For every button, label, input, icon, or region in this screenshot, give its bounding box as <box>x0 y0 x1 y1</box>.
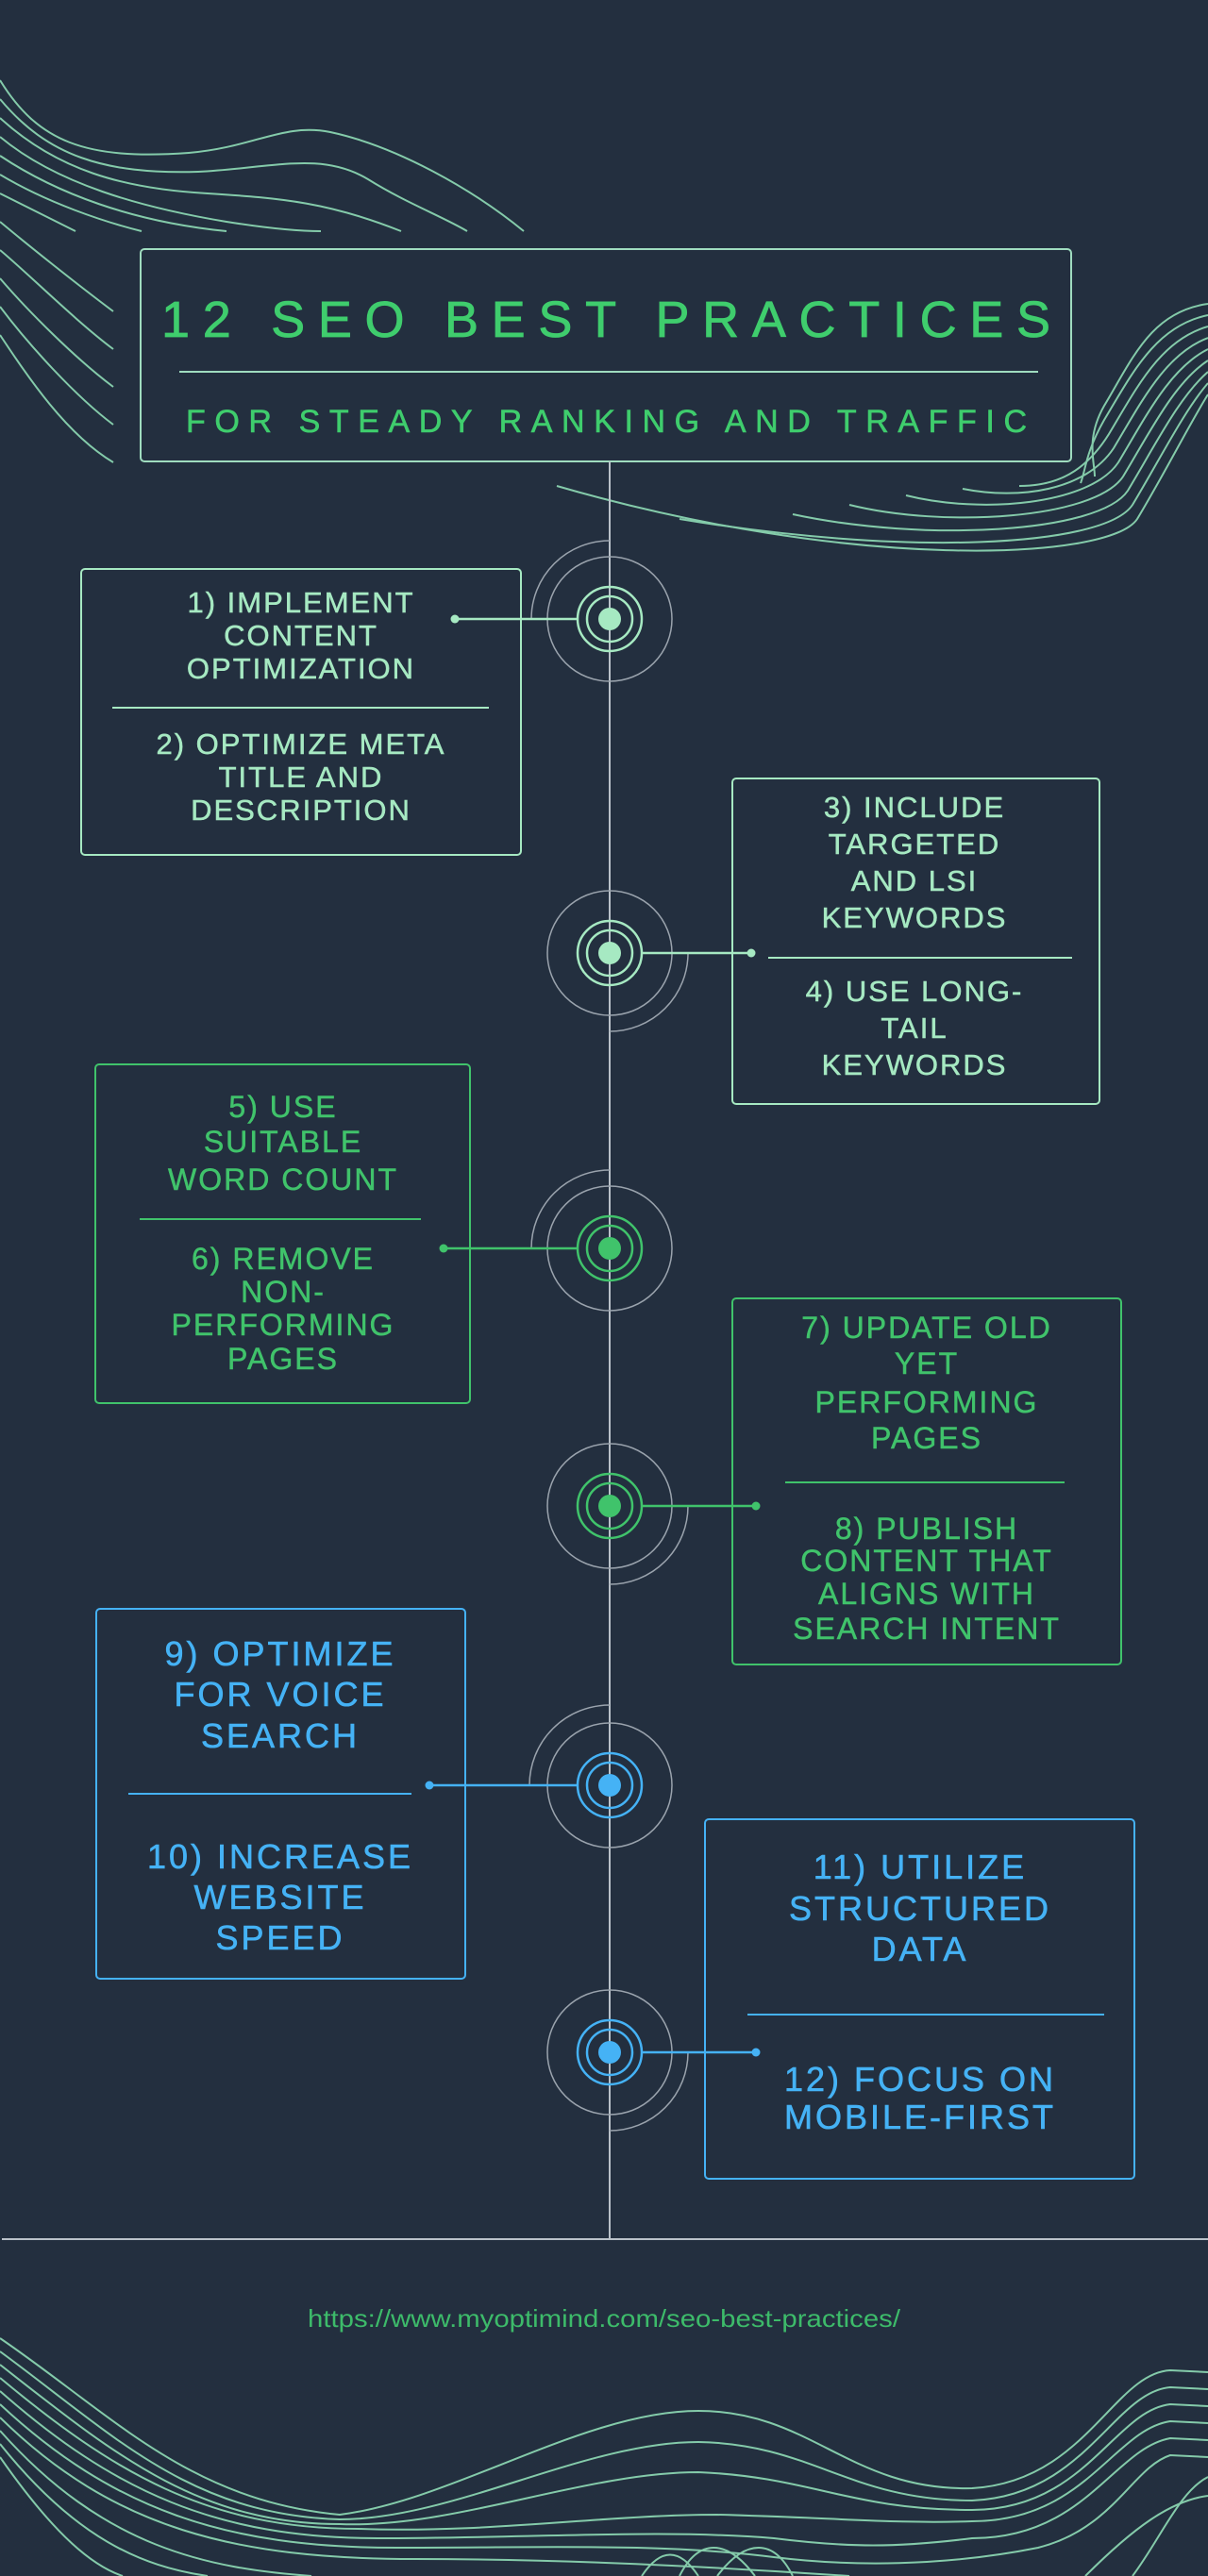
panel: box 1-2: 1) IMPLEMENT <box>187 586 415 619</box>
panel: box 7-8: PERFORMING <box>815 1385 1038 1419</box>
panel: box 3-4: KEYWORDS <box>822 901 1007 934</box>
panel: box 1-2: TITLE AND <box>219 761 383 794</box>
panel: box 3-4: 4) USE LONG- <box>806 975 1023 1008</box>
panel: box 3-4: 3) INCLUDE <box>824 791 1005 824</box>
panel: box 1-2: CONTENT <box>224 619 378 652</box>
panel: box 9-10: FOR VOICE <box>174 1675 387 1714</box>
panel: box 7-8: 7) UPDATE OLD <box>801 1311 1052 1345</box>
panel: box 3-4: AND LSI <box>851 864 978 897</box>
panel: box 1-2: DESCRIPTION <box>191 794 411 827</box>
panel: box 11-12: MOBILE-FIRST <box>784 2098 1056 2136</box>
panel: box 5-6: NON- <box>241 1275 326 1309</box>
panel: box 5-6: 5) USE <box>228 1090 338 1124</box>
panel: box 11-12 <box>705 1819 1134 2179</box>
panel: box 7-8 <box>732 1298 1121 1664</box>
panel: box 5-6: SUITABLE <box>204 1125 362 1159</box>
panel: box 9-10: 9) OPTIMIZE <box>164 1634 396 1673</box>
node 2 <box>547 891 755 1031</box>
panel: box 7-8: PAGES <box>871 1421 982 1455</box>
panel: box 1-2: 2) OPTIMIZE META <box>157 728 445 761</box>
node 6 <box>547 1990 761 2131</box>
timeline line <box>609 461 611 2239</box>
panel: box 7-8: 8) PUBLISH <box>835 1512 1018 1546</box>
title: 12 SEO BEST PRACTICES <box>161 292 1050 348</box>
panel: box 7-8: SEARCH INTENT <box>793 1612 1061 1646</box>
node 1 <box>451 541 672 681</box>
panel: box 1-2 <box>81 569 521 855</box>
panel: box 11-12: 11) UTILIZE <box>814 1848 1027 1886</box>
panel: box 3-4 <box>732 778 1099 1104</box>
panel: box 11-12: 12) FOCUS ON <box>784 2060 1056 2099</box>
panel: box 1-2: OPTIMIZATION <box>187 652 415 685</box>
panel: box 5-6: PERFORMING <box>172 1308 394 1342</box>
node 3 <box>440 1170 672 1311</box>
panel: box 3-4: TAIL <box>881 1012 948 1045</box>
panel: box 3-4: TARGETED <box>829 828 1000 861</box>
panel: box 7-8: ALIGNS WITH <box>818 1577 1035 1611</box>
panel: box 7-8: YET <box>895 1347 959 1380</box>
panel: box 9-10: SPEED <box>215 1918 345 1957</box>
panel: box 3-4: KEYWORDS <box>822 1048 1007 1081</box>
panel: box 11-12: STRUCTURED <box>789 1889 1051 1928</box>
panel: box 5-6: WORD COUNT <box>168 1163 398 1196</box>
panel: box 9-10: 10) INCREASE <box>147 1837 413 1876</box>
node 4 <box>547 1444 761 1584</box>
panel: box 9-10: SEARCH <box>201 1716 360 1755</box>
panel: box 5-6 <box>95 1064 470 1403</box>
panel: box 5-6: 6) REMOVE <box>192 1242 375 1276</box>
panel: box 9-10 <box>96 1609 465 1979</box>
panel: box 9-10: WEBSITE <box>193 1878 367 1916</box>
node 5 <box>425 1705 672 1848</box>
panel: box 7-8: CONTENT THAT <box>800 1544 1053 1578</box>
footer url: https://www.myoptimind.com/seo-best-practices/ <box>308 2304 901 2333</box>
subtitle: FOR STEADY RANKING AND TRAFFIC <box>186 404 1027 440</box>
panel: box 5-6: PAGES <box>227 1342 339 1376</box>
title box <box>141 249 1071 461</box>
panel: box 11-12: DATA <box>872 1930 968 1968</box>
